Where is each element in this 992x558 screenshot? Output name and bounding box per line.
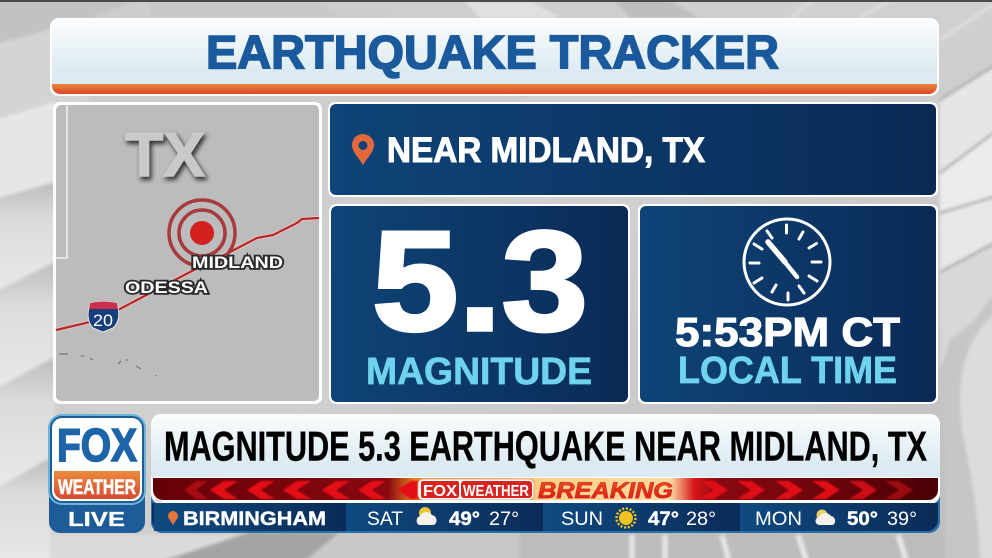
icon: clock (744, 219, 830, 305)
breaking logo badge (418, 479, 534, 500)
scattered map specks (59, 354, 156, 376)
panel: local time (638, 204, 938, 404)
forecast: Sunday: 28° (686, 509, 716, 530)
city label: Odessa: ODESSA (125, 278, 208, 297)
forecast: Monday: 50° (847, 509, 878, 530)
magnitude value: 5.3 (372, 202, 588, 361)
breaking label: BREAKING (538, 478, 673, 503)
logo text: LIVE: LIVE (68, 509, 125, 531)
forecast: Saturday (367, 507, 519, 530)
panel: location (328, 102, 938, 197)
interstate 20 shield: 20 (93, 311, 113, 330)
forecast: Sunday: SUN (561, 509, 603, 530)
weather ticker (152, 503, 938, 531)
highway I-20 (56, 218, 319, 330)
map label: TX: TX (127, 124, 207, 193)
logo: Fox Weather Live (48, 414, 146, 533)
epicenter marker (169, 200, 235, 266)
time value: 5:53PM CT (675, 309, 900, 355)
time label: LOCAL TIME (678, 350, 897, 392)
logo: weather badge: WEATHER (58, 476, 136, 499)
city label: Midland: MIDLAND (192, 253, 283, 272)
icon: location pin (352, 134, 374, 165)
forecast: Monday: 39° (887, 509, 917, 530)
panel: magnitude (329, 202, 630, 404)
forecast: Sunday (561, 508, 716, 530)
forecast: Saturday: 49° (449, 509, 480, 530)
chevrons right (700, 481, 913, 499)
forecast: Monday (755, 509, 917, 530)
chevrons left (184, 481, 419, 499)
panel: lower third headline (151, 414, 940, 533)
icon: ticker pin (168, 511, 178, 525)
location text: NEAR MIDLAND, TX (387, 131, 706, 170)
breaking logo badge: FOX (423, 483, 457, 500)
panel: map of west Texas (53, 102, 322, 404)
forecast: Saturday: 27° (489, 509, 519, 530)
interstate 20 shield (88, 302, 119, 332)
panel: title banner (50, 18, 939, 96)
forecast: Saturday: SAT (367, 509, 403, 530)
breaking news strip (152, 478, 938, 503)
ticker city: BIRMINGHAM (183, 509, 326, 530)
logo text: FOX: FOX (57, 419, 137, 471)
heading: earthquake tracker: EARTHQUAKE TRACKER (206, 26, 779, 78)
forecast: Monday: MON (755, 509, 802, 530)
map label: TX: TX (125, 121, 205, 190)
forecast: Sunday: 47° (648, 509, 679, 530)
breaking logo badge: WEATHER (463, 483, 529, 500)
magnitude label: MAGNITUDE (366, 351, 592, 393)
